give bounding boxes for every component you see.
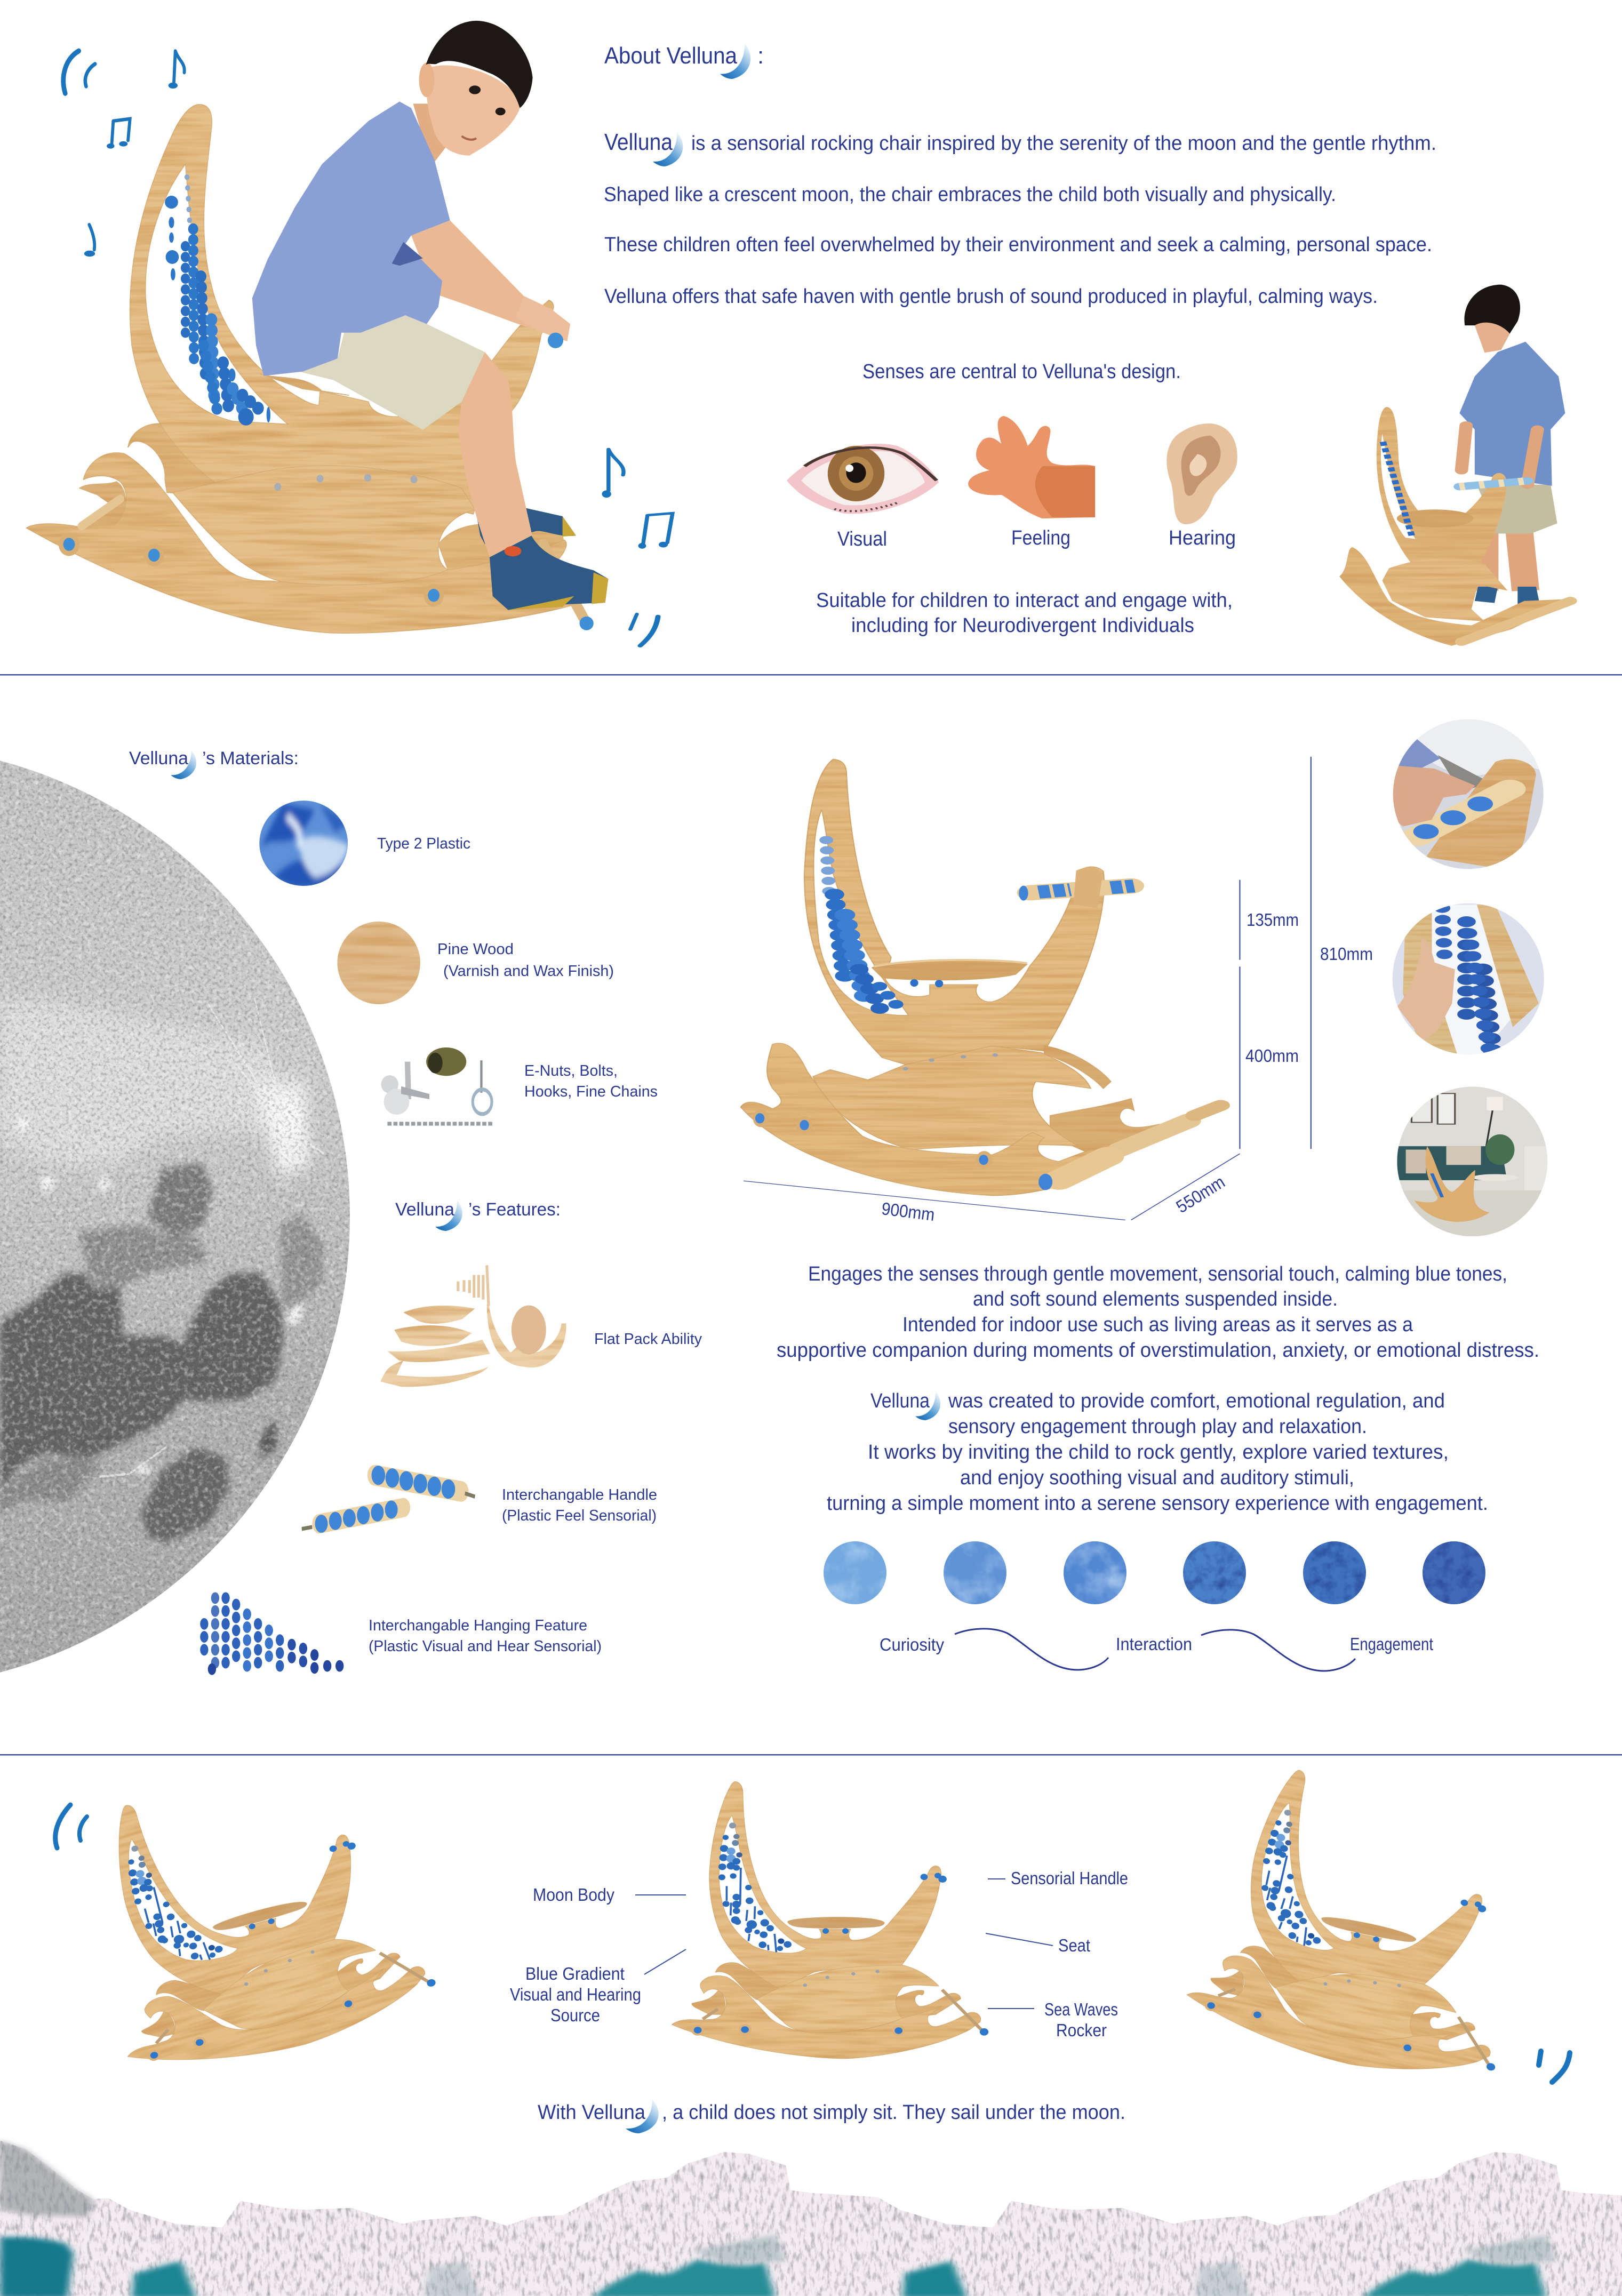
label: Sea Waves Rocker: Sea Waves (1044, 1999, 1118, 2019)
panel: senses and standing child (602, 285, 1574, 646)
text block: purpose of Velluna: was created to provide comfort, emotional regulation, and (948, 1390, 1445, 1412)
text block: how the senses are engaged: Intended for indoor use such as living areas as it serves as a (902, 1314, 1413, 1336)
icon: eye (visual) (787, 444, 939, 514)
heading: Velluna's Materials (129, 748, 299, 779)
icon: ear (hearing) (1166, 423, 1237, 524)
image: interchangeable handles (302, 1475, 475, 1529)
text block: about Velluna: Shaped like a crescent moon, the chair embraces the child both visually and physically. (604, 183, 1336, 206)
heading: Velluna's Features (395, 1199, 561, 1231)
label: Blue Gradient: Visual and Hearing (510, 1985, 641, 2004)
image: ocean waves footer (0, 2140, 1622, 2296)
dimension label: 400mm: 400mm (1245, 1046, 1299, 1066)
text block: purpose of Velluna: turning a simple moment into a serene sensory experience with engagement. (827, 1492, 1488, 1515)
chair tilted forward (1180, 1757, 1547, 2094)
heading: Velluna's Features: Velluna (395, 1199, 454, 1220)
text block: purpose of Velluna: Velluna (870, 1390, 930, 1412)
watercolour blue gradient circles (824, 1541, 1485, 1604)
text block: purpose of Velluna: and enjoy soothing visual and auditory stimuli, (960, 1467, 1354, 1489)
label: interchangeable handle: (Plastic Feel Sensorial) (502, 1507, 657, 1524)
label: interchangeable handle: Interchangable Handle (502, 1486, 657, 1503)
wave connector: interaction to engagement (1201, 1630, 1355, 1671)
dimension label: 900mm: 900mm (881, 1198, 936, 1225)
label: Seat (986, 1933, 1090, 1955)
label: Interaction: Interaction (1116, 1634, 1192, 1654)
panel: dimensioned chair and detail photos (741, 718, 1553, 1238)
label: pine wood (437, 941, 614, 980)
swatch: type 2 plastic (259, 801, 348, 886)
label: Hearing: Hearing (1169, 527, 1236, 549)
section heading: About Velluna (604, 43, 764, 79)
text: suitability statement: including for Neurodivergent Individuals (851, 614, 1194, 637)
text block: about Velluna: Velluna (604, 129, 673, 155)
panel: rocking motion sequence (65, 1740, 1570, 2094)
label: Visual: Visual (837, 528, 887, 550)
chair upright with annotations (672, 1781, 988, 2059)
panel: materials and features (204, 797, 566, 1670)
text block: purpose of Velluna (827, 1390, 1488, 1515)
text block: how the senses are engaged: supportive companion during moments of overstimulation, anxiety, or emotional distress. (777, 1339, 1539, 1362)
rocking chair body (26, 105, 594, 633)
closing statement (538, 2100, 1125, 2133)
seated child (252, 21, 608, 610)
dimension label: 135mm: 135mm (1247, 910, 1299, 930)
label: Moon Body: Moon Body (533, 1885, 614, 1905)
label: Seat: Seat (1058, 1935, 1090, 1955)
label: interchangeable handle (502, 1486, 657, 1524)
hanging discs (826, 840, 902, 1013)
dimension label: 550mm: 550mm (1172, 1172, 1228, 1217)
label: pine wood: (Varnish and Wax Finish) (443, 963, 614, 980)
text block: how the senses are engaged: Engages the senses through gentle movement, sensorial touch, calming blue tones, (808, 1263, 1507, 1285)
icon: sound arcs left of chair (55, 1805, 87, 1848)
icon: sound waves right (1539, 2051, 1570, 2082)
photo: hand touching discs (1392, 903, 1547, 1058)
text block: about Velluna: is a sensorial rocking chair inspired by the serenity of the moon and the gentle rhythm. (691, 132, 1436, 155)
label: interchangeable hanging feature: (Plastic Visual and Hear Sensorial) (369, 1638, 602, 1655)
closing statement: With Velluna (538, 2101, 646, 2124)
label: flat pack: Flat Pack Ability (594, 1331, 702, 1348)
label: Sensorial Handle: Sensorial Handle (1011, 1868, 1128, 1888)
text block: about Velluna: Velluna offers that safe haven with gentle brush of sound produced in playful, calming ways. (604, 285, 1378, 308)
image: flat pack parts (381, 1265, 566, 1387)
sensorial handle (1030, 886, 1131, 893)
label: fasteners: Hooks, Fine Chains (524, 1083, 658, 1100)
icon: sound waves and music notes, top left (63, 51, 185, 257)
text: suitability statement: Suitable for children to interact and engage with, (816, 589, 1233, 612)
label: interchangeable hanging feature: Interchangable Hanging Feature (369, 1617, 587, 1634)
small scene: standing child with chair (1339, 285, 1574, 646)
heading: Velluna's Materials: ’s Materials: (202, 748, 299, 769)
section heading: About Velluna: About Velluna (604, 43, 737, 69)
label: fasteners (524, 1062, 658, 1100)
image: hanging feature discs (204, 1598, 340, 1670)
swatch: pine wood (337, 922, 420, 1004)
photo: child's hand on handle (1392, 718, 1547, 871)
label: fasteners: E-Nuts, Bolts, (524, 1062, 618, 1079)
wave connector: curiosity to interaction (955, 1629, 1108, 1670)
label: Blue Gradient: Blue Gradient (525, 1964, 625, 1983)
label: Feeling: Feeling (1011, 527, 1070, 549)
text: senses heading: Senses are central to Velluna's design. (862, 361, 1181, 383)
text block: purpose of Velluna: It works by inviting the child to rock gently, explore varied textures, (868, 1441, 1449, 1463)
icon: music notes, lower right of hero (602, 449, 673, 646)
dimension lines (744, 757, 1311, 1220)
heading: Velluna's Materials: Velluna (129, 748, 188, 769)
label: Curiosity: Curiosity (880, 1635, 944, 1654)
label: Engagement: Engagement (1350, 1634, 1433, 1654)
hanging blue discs (165, 177, 270, 426)
text block: how the senses are engaged: and soft sound elements suspended inside. (973, 1288, 1338, 1310)
text block: how the senses are engaged (777, 1263, 1539, 1362)
image: moon (0, 745, 350, 1689)
text block: about Velluna: These children often feel overwhelmed by their environment and seek a calming, personal space. (604, 234, 1432, 256)
icon: hand (feeling) (968, 416, 1095, 518)
panel: hero rocking chair with seated child (26, 21, 608, 633)
label: type 2 plastic: Type 2 Plastic (377, 835, 470, 852)
chair tilted back (65, 1740, 442, 2090)
section heading: About Velluna: : (757, 43, 764, 69)
text block: about Velluna (604, 129, 1436, 308)
photo: chair in living room (1392, 1085, 1553, 1238)
label: Blue Gradient: Source (550, 2005, 600, 2025)
dimension label: 810mm: 810mm (1320, 944, 1373, 964)
label: interchangeable hanging feature (369, 1617, 602, 1655)
label: Sea Waves Rocker (988, 1999, 1118, 2040)
main chair (741, 759, 1221, 1196)
label: Sea Waves Rocker: Rocker (1056, 2020, 1107, 2040)
heading: Velluna's Features: ’s Features: (468, 1199, 561, 1220)
image: nuts, bolts, hook and chain (381, 1047, 493, 1124)
closing statement: , a child does not simply sit. They sail under the moon. (662, 2101, 1125, 2124)
label: Blue Gradient (510, 1949, 686, 2025)
text block: purpose of Velluna: sensory engagement through play and relaxation. (948, 1415, 1367, 1438)
label: pine wood: Pine Wood (437, 941, 514, 958)
text: suitability statement (816, 589, 1233, 637)
